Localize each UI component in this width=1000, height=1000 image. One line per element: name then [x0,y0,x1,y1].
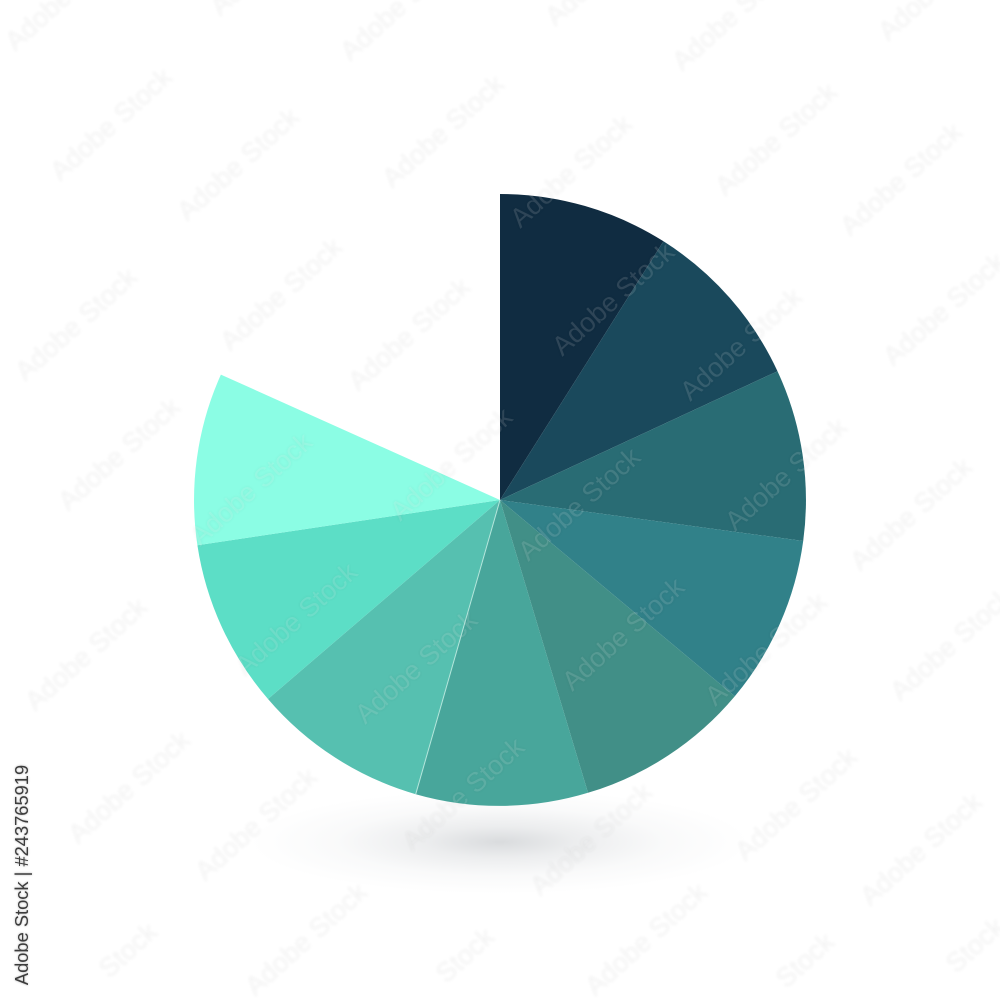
repeated diagonal watermark: Adobe Stock [729,742,863,866]
repeated diagonal watermark: Adobe Stock [674,282,808,406]
repeated diagonal watermark: Adobe Stock [349,605,483,729]
repeated diagonal watermark: Adobe Stock [854,787,988,911]
repeated diagonal watermark: Adobe Stock [546,237,680,361]
wedge 5: muted green teal [500,500,735,793]
repeated diagonal watermark: Adobe Stock [396,732,530,856]
repeated diagonal watermark: Adobe Stock [512,442,646,566]
repeated diagonal watermark: Adobe Stock [376,69,510,193]
repeated diagonal watermark: Adobe Stock [504,109,638,233]
repeated diagonal watermark: Stock [770,926,840,994]
repeated diagonal watermark: Adobe Stock [699,587,833,711]
repeated diagonal watermark: Adobe Stock [579,877,713,1000]
repeated diagonal watermark: Adobe Stock [239,877,373,1000]
repeated diagonal watermark: Adobe Stock [171,102,305,226]
repeated diagonal watermark: Stock [430,921,500,989]
wedge 4: teal [500,500,803,696]
repeated diagonal watermark: Adobe Stock [384,402,518,526]
repeated diagonal watermark: Adobe Stock [709,77,843,201]
wedge 6: medium sea green [416,500,588,806]
repeated diagonal watermark: Adobe Stock [52,392,186,516]
wedge 2: dark teal blue [500,241,778,500]
repeated diagonal watermark: Adobe Stock [556,572,690,696]
repeated diagonal watermark: Adobe Stock [719,412,853,536]
wedge 3: deep teal [500,371,806,541]
repeated diagonal watermark: Adobe Stock [342,272,476,396]
repeated diagonal watermark: Adobe Stock [214,232,348,356]
repeated diagonal watermark: Adobe Stock [189,762,323,886]
vertical stock credit text: Adobe Stock | #243765919 [11,765,32,985]
repeated diagonal watermark: Stock [93,916,163,984]
repeated diagonal watermark: Adobe Stock [9,262,143,386]
wedge 7: soft turquoise [268,500,500,794]
repeated diagonal watermark: Adobe Stock [184,427,318,551]
drop shadow under pie [250,790,750,894]
wedge 9: lightest mint [194,375,500,545]
repeated diagonal watermark: Adobe Stock [44,62,178,186]
wedge 8: bright turquoise [197,500,500,699]
repeated diagonal watermark: Adobe Stock [229,557,363,681]
wedge 1: darkest navy [500,194,664,500]
repeated diagonal watermark: Adobe Stock [62,725,196,849]
repeated diagonal watermark: Adobe Stock [19,592,153,716]
repeated diagonal watermark: Adobe Stock [844,452,978,576]
repeated diagonal watermark: Adobe Stock [834,117,968,241]
repeated diagonal watermark: Adobe Stock [524,777,658,901]
